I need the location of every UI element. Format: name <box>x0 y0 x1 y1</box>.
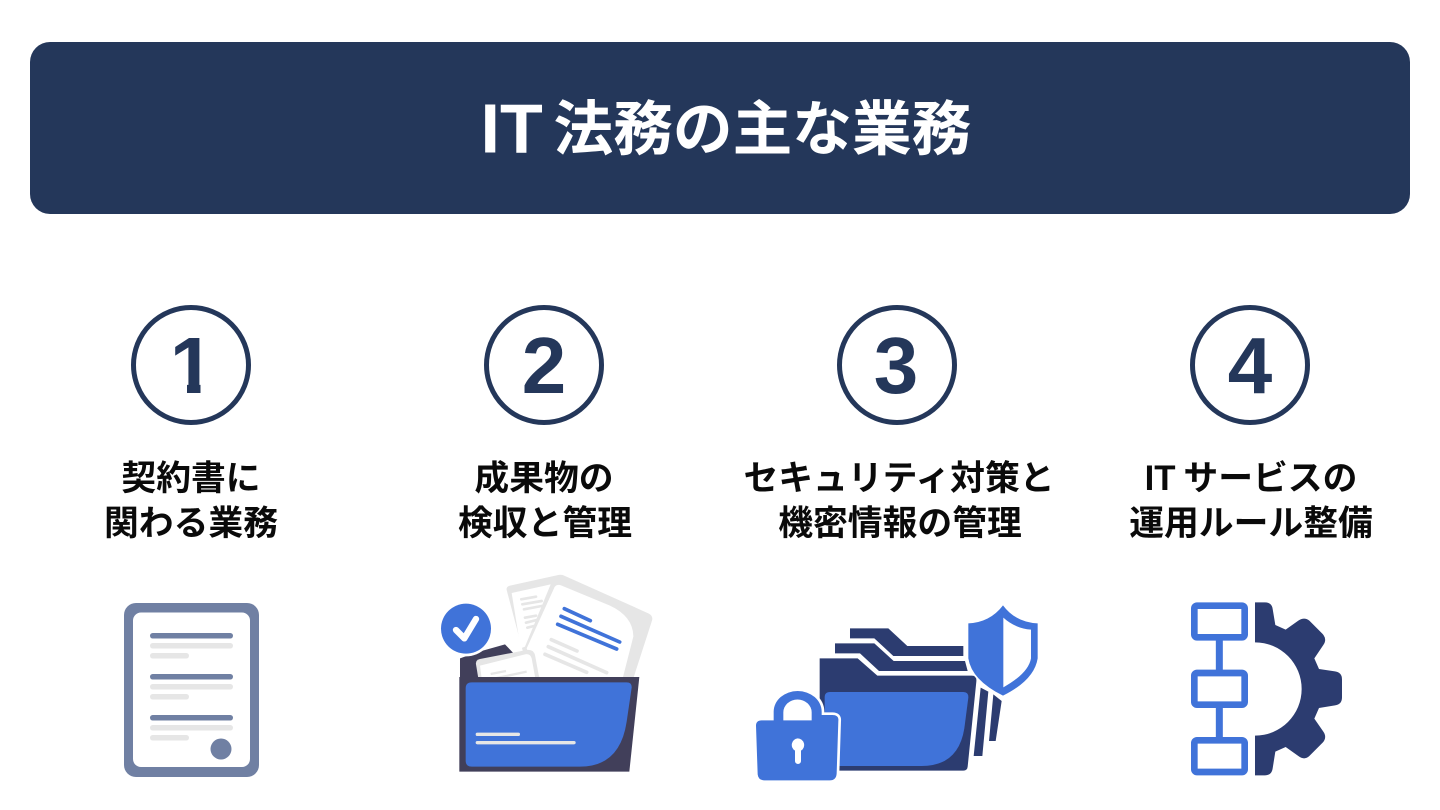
heading 3: セキュリティ対策と <box>743 451 1055 501</box>
number badge 1: 1 <box>170 321 214 410</box>
heading 2: 検収と管理 <box>458 496 632 546</box>
column 4: IT service operations <box>1129 308 1373 775</box>
title: 法務の主な業務 <box>554 82 971 168</box>
heading 1: 関わる業務 <box>104 496 278 546</box>
title banner <box>30 42 1410 214</box>
icon: folders with lock and shield <box>756 605 1038 780</box>
number badge 4: 4 <box>1228 321 1273 410</box>
heading 3: 機密情報の管理 <box>778 496 1022 546</box>
number badge 3 <box>840 308 954 422</box>
heading 2: 成果物の <box>474 451 614 501</box>
number badge 3: 3 <box>874 321 918 410</box>
icon: folder with documents and check <box>438 575 652 772</box>
number badge 1 <box>134 308 248 422</box>
column 1: contract work <box>104 308 278 777</box>
heading 4: IT サービスの <box>1145 451 1357 501</box>
number badge 2 <box>486 308 602 422</box>
title: IT <box>480 90 543 168</box>
column 3: security <box>743 308 1055 780</box>
heading 4: 運用ルール整備 <box>1129 496 1373 546</box>
heading 1: 契約書に <box>121 451 261 501</box>
icon: contract document <box>124 603 259 777</box>
icon: flow and gear <box>1194 602 1342 775</box>
heading 1 <box>104 451 278 546</box>
column 2: deliverables <box>438 308 652 772</box>
heading 2 <box>458 451 632 546</box>
number badge 4 <box>1192 308 1308 422</box>
number badge 2: 2 <box>522 321 566 410</box>
heading 4 <box>1129 451 1373 546</box>
heading 3 <box>743 451 1055 546</box>
